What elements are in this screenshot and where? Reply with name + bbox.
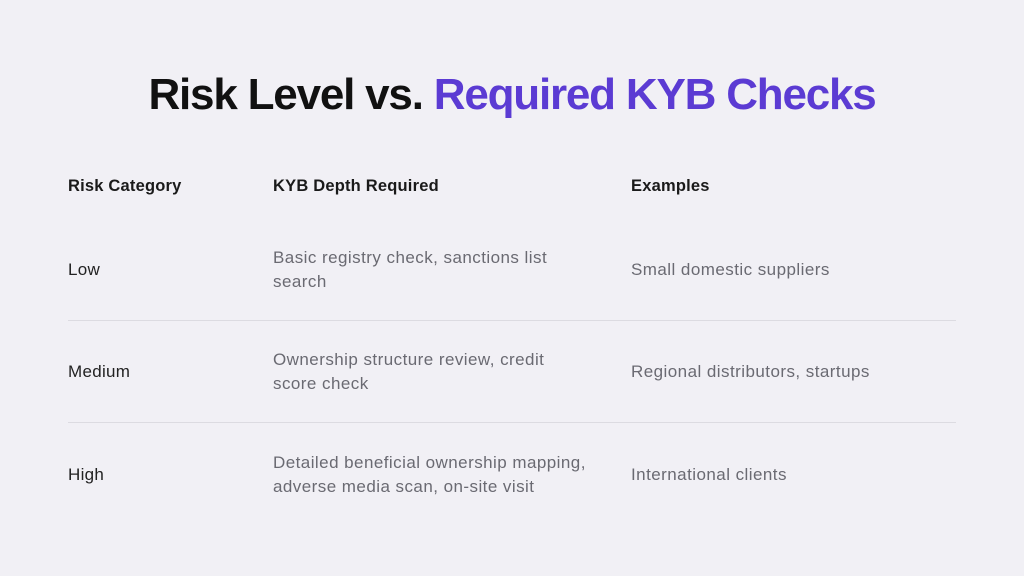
high depth: Detailed beneficial ownership mapping, [273, 453, 586, 472]
medium examples: Regional distributors, startups [631, 362, 870, 381]
row: medium: Medium [68, 362, 130, 381]
medium depth: score check [273, 374, 369, 393]
low examples: Small domestic suppliers [631, 260, 830, 279]
high depth: adverse media scan, on-site visit [273, 477, 534, 496]
header: examples: Examples [631, 177, 710, 195]
medium depth [273, 350, 544, 393]
low depth: Basic registry check, sanctions list [273, 248, 547, 267]
title: Risk Level vs. Required KYB Checks [148, 70, 876, 119]
low depth [273, 248, 547, 291]
high examples: International clients [631, 465, 787, 484]
header: kyb depth: KYB Depth Required [273, 177, 439, 195]
row: low: Low [68, 260, 100, 279]
medium depth: Ownership structure review, credit [273, 350, 544, 369]
header: risk category: Risk Category [68, 177, 182, 195]
high depth [273, 453, 586, 496]
row: high: High [68, 465, 104, 484]
low depth: search [273, 272, 327, 291]
